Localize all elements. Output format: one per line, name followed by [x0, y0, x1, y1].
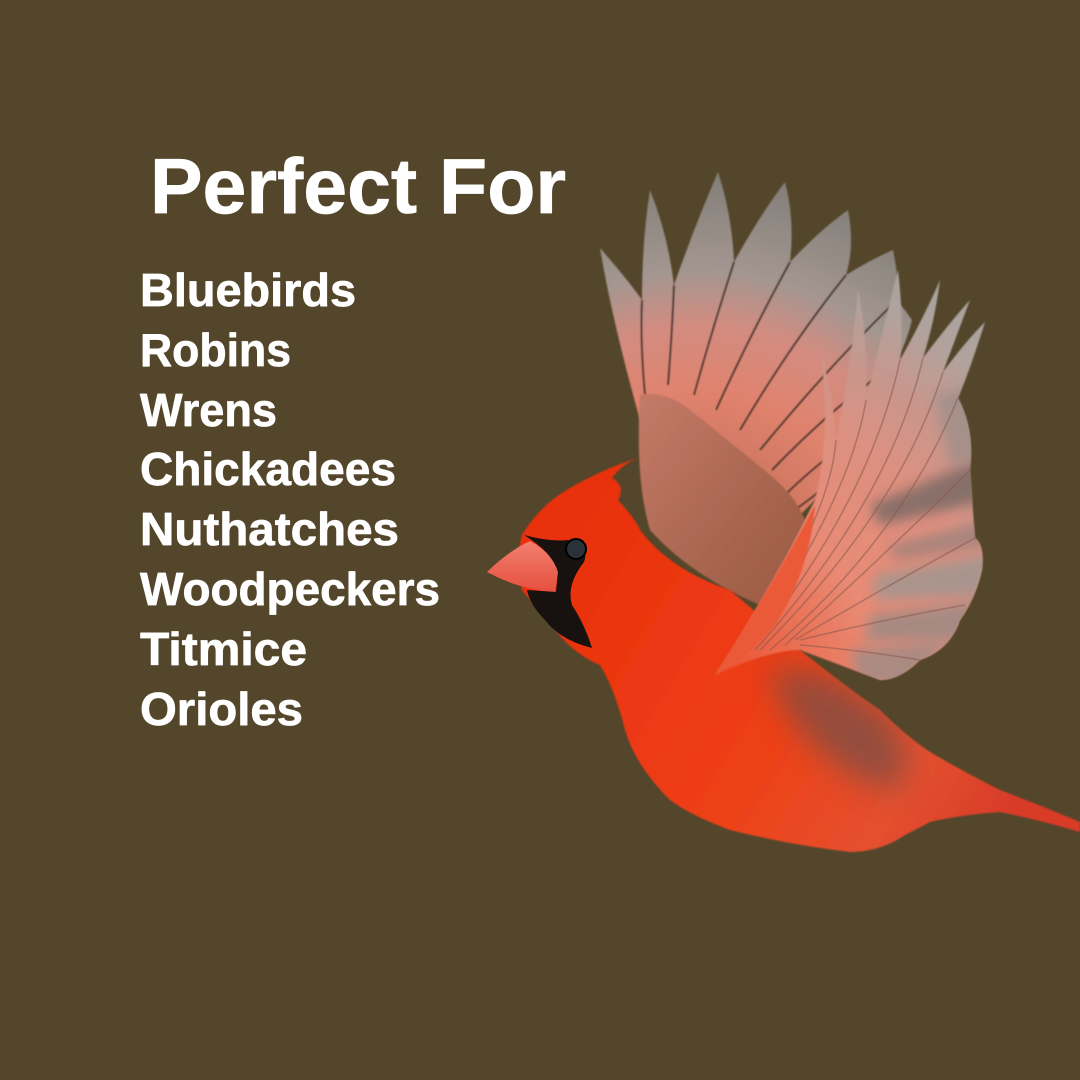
- near wing feather lines: [740, 358, 975, 660]
- far wing feather gaps: [641, 262, 897, 510]
- gray feather bands: [850, 385, 990, 690]
- list item: Titmice: Titmice: [140, 623, 307, 675]
- black face mask: [524, 535, 592, 648]
- illustration: flying red cardinal: [487, 172, 1080, 852]
- far wing: [600, 172, 912, 525]
- red wing leading edge: [715, 505, 815, 675]
- bird species list: [140, 264, 440, 735]
- title: Perfect For: [150, 142, 566, 230]
- list item: Bluebirds: Bluebirds: [140, 264, 356, 316]
- far wing coverts: [639, 394, 805, 605]
- belly shading: [770, 669, 906, 790]
- near wing: [715, 270, 990, 690]
- list item: Orioles: Orioles: [140, 683, 303, 735]
- near wing shape: [715, 270, 985, 680]
- list item: Chickadees: Chickadees: [140, 443, 396, 495]
- list item: Woodpeckers: Woodpeckers: [140, 563, 440, 615]
- list item: Wrens: Wrens: [140, 384, 277, 436]
- list item: Robins: Robins: [140, 324, 291, 376]
- bird body: [518, 458, 1080, 852]
- list item: Nuthatches: Nuthatches: [140, 503, 399, 555]
- far wing feather fan: [600, 172, 912, 525]
- beak: [487, 541, 558, 592]
- eye: [566, 539, 586, 559]
